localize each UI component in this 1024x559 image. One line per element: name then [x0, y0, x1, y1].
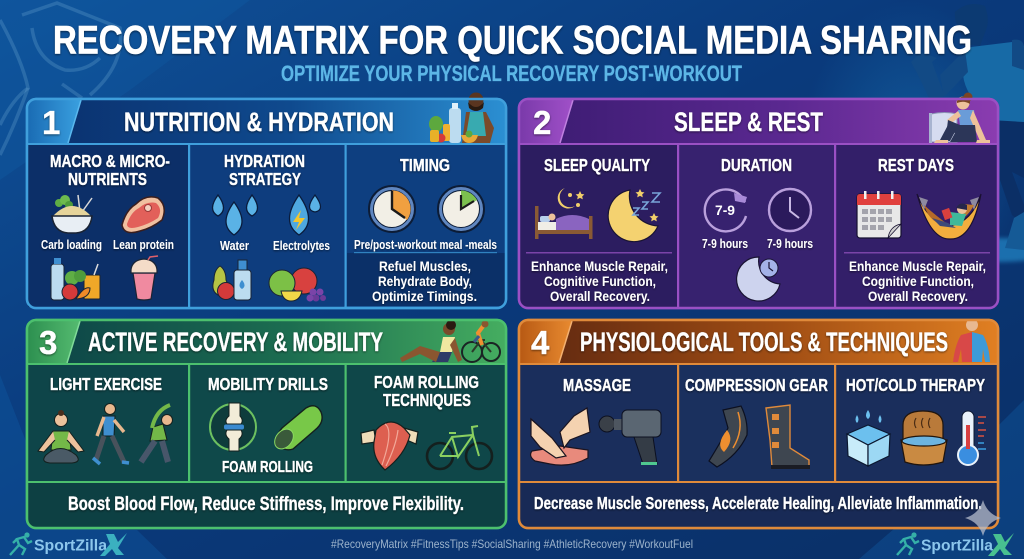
- column: compression gear: [679, 365, 834, 481]
- benefit text: [372, 258, 477, 304]
- column: macro and micro nutrients: [28, 145, 188, 307]
- benefit text: [849, 258, 986, 304]
- column: massage: [520, 365, 677, 481]
- icon: compression sleeve: [709, 406, 747, 467]
- icon: thermometer: [958, 411, 986, 465]
- icon: crescent moon with zzz: [608, 189, 660, 242]
- header band 2: 2: [533, 104, 551, 141]
- icon: woman resting on pillow: [929, 92, 990, 143]
- icon: massage gun: [599, 410, 661, 465]
- band: benefit: [519, 481, 998, 527]
- header band 1: [27, 100, 506, 145]
- header band 4: [519, 321, 998, 365]
- icon: wooden tub: [901, 411, 947, 465]
- benefit text: Overall Recovery.: [868, 288, 968, 304]
- column: foam rolling techniques: FOAM ROLLING: [374, 372, 479, 392]
- column: hydration strategy: [190, 145, 344, 307]
- icon: sparkle watermark: [965, 500, 1001, 536]
- icon: foam roller: [271, 406, 322, 453]
- column: hot and cold therapy: HOT/COLD THERAPY: [846, 375, 985, 395]
- benefit text: Enhance Muscle Repair,: [531, 258, 668, 274]
- icon: massage hands: [531, 408, 590, 465]
- column: macro and micro nutrients: MACRO & MICRO-: [50, 151, 170, 171]
- header band 1: NUTRITION & HYDRATION: [124, 107, 394, 137]
- column: mobility drills: [190, 365, 344, 481]
- label: foam rolling: FOAM ROLLING: [222, 459, 313, 476]
- label: meal timing: Pre/post-workout meal -meals: [354, 238, 497, 252]
- column: duration: DURATION: [721, 155, 792, 175]
- benefit text: Refuel Muscles,: [379, 258, 471, 274]
- header band 4: 4: [531, 324, 550, 361]
- label: water: Water: [220, 239, 249, 253]
- icon: smoothie cup: [131, 256, 158, 300]
- column: rest days: REST DAYS: [878, 155, 954, 175]
- icon: muscle: [361, 422, 418, 470]
- icon: cycle clock: [705, 189, 747, 231]
- column: mobility drills: MOBILITY DRILLS: [208, 374, 328, 394]
- icon: man with food and water: [429, 92, 494, 143]
- header band 1: 1: [42, 104, 60, 141]
- subtitle: OPTIMIZE YOUR PHYSICAL RECOVERY POST-WORKOUT: [281, 61, 742, 86]
- column: light exercise: [28, 365, 188, 481]
- label: carb loading: Carb loading: [41, 238, 102, 252]
- benefit text: Cognitive Function,: [862, 273, 974, 289]
- icon: rice bowl: [52, 195, 92, 233]
- column: duration: [679, 145, 834, 307]
- icon: clock pre workout: [369, 186, 415, 232]
- logo right: [897, 532, 1014, 556]
- panel: active recovery and mobility: [27, 320, 506, 528]
- header band 2: [519, 100, 998, 145]
- column: timing: [347, 145, 505, 306]
- column: massage: MASSAGE: [563, 375, 631, 395]
- icon: clock post workout: [438, 186, 484, 232]
- logo right: SportZilla: [921, 538, 993, 554]
- icon: side bend person: [141, 405, 172, 462]
- icon: person in hammock: [917, 194, 981, 239]
- benefit text: Rehydrate Body,: [378, 273, 472, 289]
- header band 2: SLEEP & REST: [674, 107, 823, 137]
- icon: steak: [122, 197, 164, 233]
- icon: cycle clock: 7-9: [715, 202, 735, 218]
- label: hours right: 7-9 hours: [767, 237, 813, 251]
- column: macro and micro nutrients: NUTRIENTS: [68, 169, 147, 189]
- icon: water drops: [212, 195, 258, 235]
- column: hydration strategy: STRATEGY: [229, 169, 301, 189]
- column: light exercise: LIGHT EXERCISE: [50, 374, 162, 394]
- logo left: [10, 532, 127, 556]
- panel: sleep and rest: [519, 92, 998, 308]
- icon: ice cube: [847, 410, 890, 466]
- label: lean protein: Lean protein: [113, 238, 174, 252]
- band: benefit: [27, 481, 506, 527]
- icon: compression boot: [766, 405, 810, 469]
- column: hot and cold therapy: [836, 365, 997, 481]
- icon: clock: [769, 189, 811, 231]
- column: foam rolling techniques: [347, 365, 505, 481]
- icon: bicycle: [427, 426, 492, 469]
- column: rest days: [836, 145, 997, 307]
- column: compression gear: COMPRESSION GEAR: [685, 375, 828, 395]
- icon: meditation: [38, 410, 84, 463]
- header band 3: ACTIVE RECOVERY & MOBILITY: [88, 327, 383, 357]
- logo left: SportZilla: [34, 538, 107, 554]
- athlete silhouette: [911, 4, 1024, 262]
- icon: apples, lemon and grapes: [269, 268, 326, 302]
- icon: bottle, vegetables and juice: [51, 258, 100, 300]
- benefit text: Overall Recovery.: [550, 288, 650, 304]
- column: hydration strategy: HYDRATION: [224, 151, 305, 171]
- header band 3: 3: [39, 324, 57, 361]
- column: sleep quality: SLEEP QUALITY: [544, 155, 650, 175]
- benefit text: Enhance Muscle Repair,: [849, 258, 986, 274]
- column: foam rolling techniques: TECHNIQUES: [383, 390, 471, 410]
- header band 3: [27, 321, 506, 365]
- label: hours left: 7-9 hours: [702, 237, 748, 251]
- column: sleep quality: [520, 145, 677, 307]
- benefit text: [531, 258, 668, 304]
- panel: physiological tools and techniques: [519, 319, 998, 528]
- icon: walking person: [93, 404, 129, 464]
- hashtags: #RecoveryMatrix #FitnessTips #SocialSharing #AthleticRecovery #WorkoutFuel: [331, 537, 693, 551]
- decorative shield emblem: [0, 3, 121, 155]
- band: benefit: Boost Blood Flow, Reduce Stiffness, Improve Flexibility.: [68, 494, 464, 515]
- label: electrolytes: Electrolytes: [273, 239, 330, 253]
- icon: cyclist: [462, 320, 500, 362]
- benefit text: Cognitive Function,: [544, 273, 656, 289]
- icon: bed with moon: [535, 188, 592, 239]
- benefit text: Optimize Timings.: [372, 288, 477, 304]
- icon: hot and cold body: [953, 319, 990, 362]
- icon: woman stretching: [400, 320, 462, 362]
- icon: moon with clock: [737, 257, 780, 301]
- icon: calendar: [857, 191, 901, 238]
- icon: knee joint: [210, 403, 256, 451]
- icon: electrolyte drop: [290, 195, 320, 235]
- column: timing: TIMING: [400, 155, 450, 175]
- icon: pear, apple and bottle: [213, 260, 251, 300]
- panel: nutrition and hydration: [27, 92, 506, 308]
